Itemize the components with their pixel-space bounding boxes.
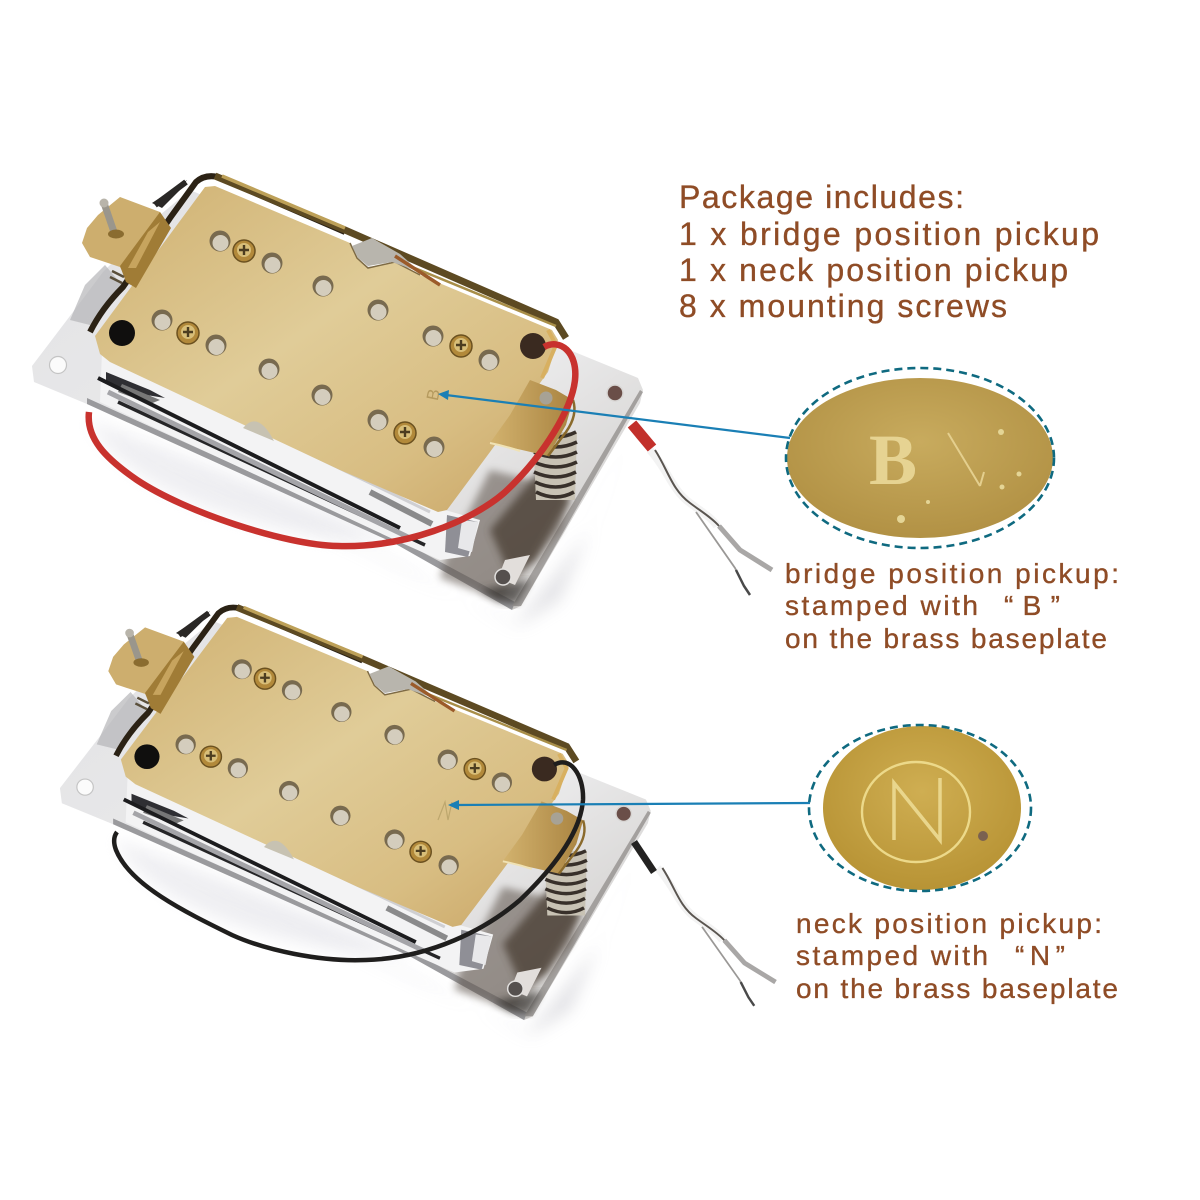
- callout: B stamp magnified: B: [869, 420, 917, 500]
- stamp: N on baseplate: [438, 802, 452, 820]
- arrow: to N stamp: [448, 800, 810, 810]
- label: neck position pickup: stamped with: [796, 940, 988, 971]
- pickup: neck position: [60, 607, 776, 1034]
- callout: B stamp magnified: [786, 368, 1054, 548]
- pickup: bridge position: [32, 176, 772, 625]
- heading: package includes: Package includes:: [679, 179, 964, 215]
- label: neck position pickup: on the brass baseplate: [796, 973, 1118, 1004]
- wire: black lead: [114, 762, 583, 960]
- arrow: to B stamp: [438, 390, 790, 438]
- label: neck position pickup: [796, 908, 1118, 1004]
- heading: package includes: [679, 179, 1099, 324]
- callout: N stamp magnified: [809, 725, 1031, 891]
- stamp: B on baseplate: B: [423, 387, 444, 402]
- wire: red sleeve: [632, 424, 652, 448]
- label: bridge position pickup: “B”: [1004, 590, 1060, 621]
- label: neck position pickup: neck position pickup:: [796, 908, 1102, 939]
- label: neck position pickup: “N”: [1015, 940, 1065, 971]
- heading: package includes: 8 x mounting screws: [679, 288, 1007, 324]
- label: bridge position pickup: on the brass baseplate: [785, 623, 1107, 654]
- wire: black sleeve: [634, 842, 654, 872]
- label: bridge position pickup: [785, 558, 1119, 654]
- label: bridge position pickup: bridge position pickup:: [785, 558, 1119, 589]
- wire: red lead: [89, 344, 575, 546]
- heading: package includes: 1 x neck position pickup: [679, 252, 1068, 288]
- label: bridge position pickup: stamped with: [785, 590, 978, 621]
- heading: package includes: 1 x bridge position pickup: [679, 216, 1099, 252]
